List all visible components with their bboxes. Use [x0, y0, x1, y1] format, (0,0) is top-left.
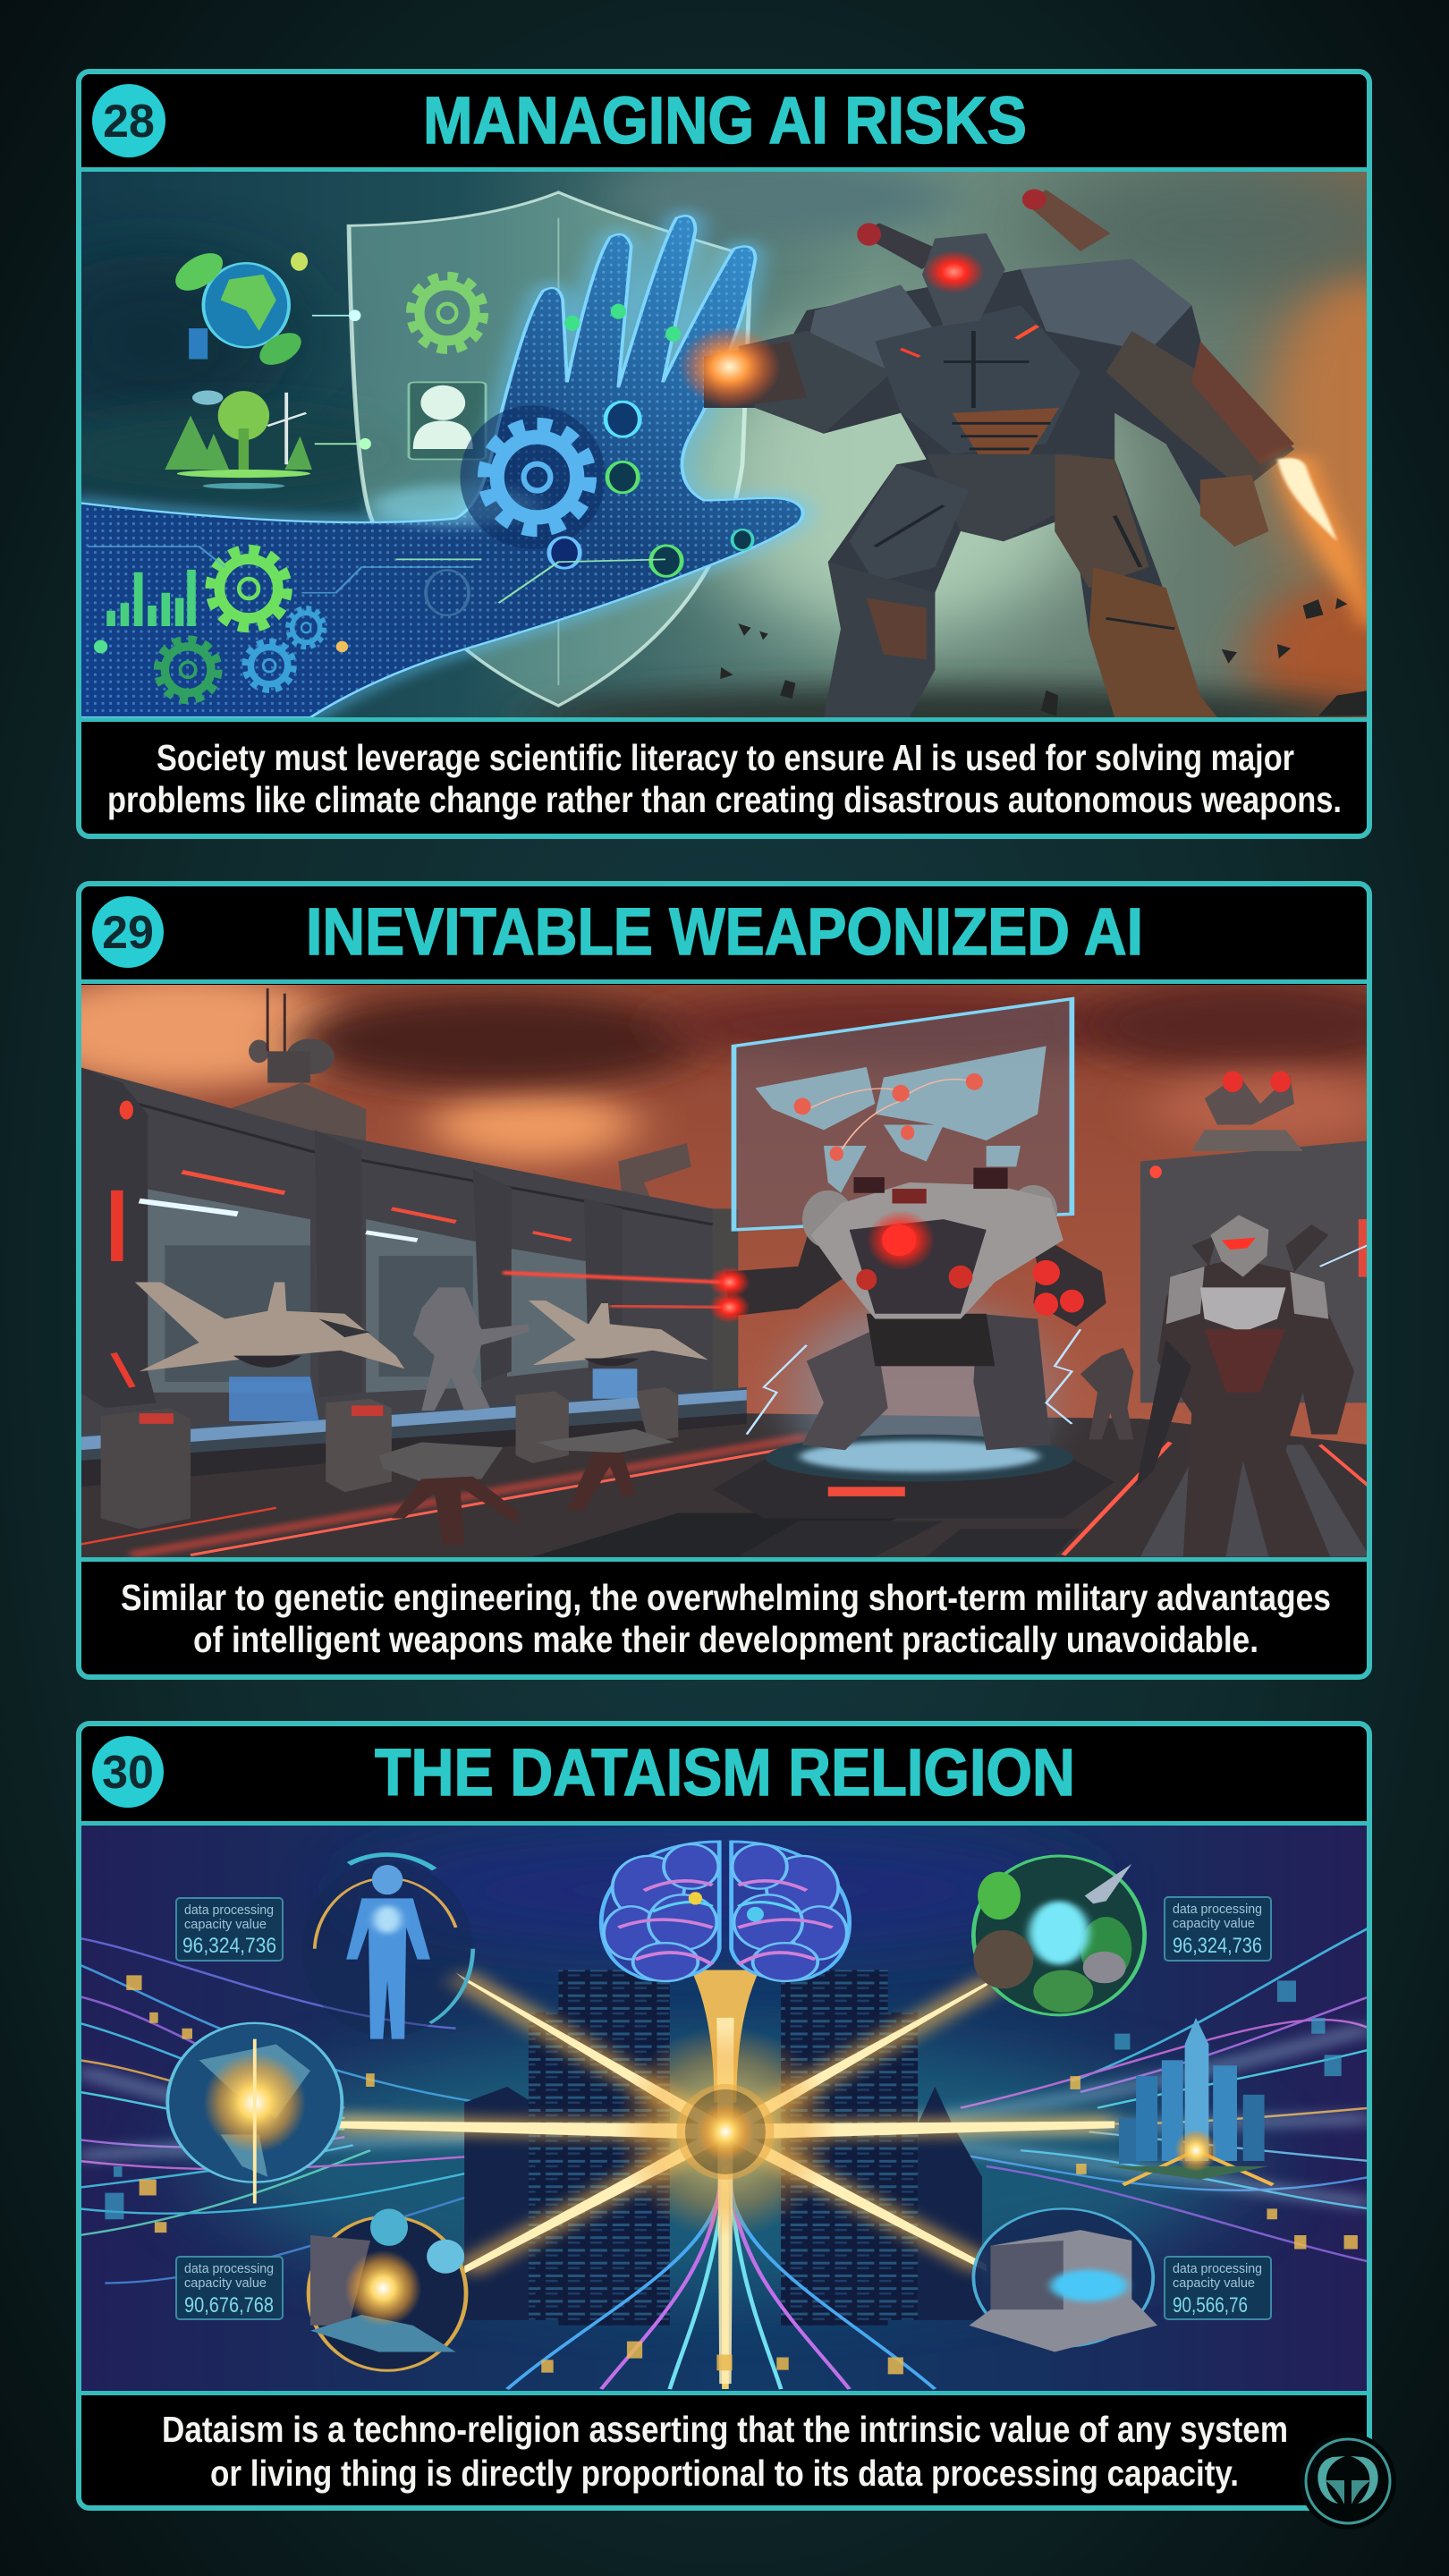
caption — [107, 737, 1342, 820]
data label: bottom left — [176, 2257, 283, 2319]
data label: top right: data processing — [1173, 1902, 1262, 1917]
background soldier — [1080, 1348, 1133, 1440]
conveyor and consoles — [80, 1387, 747, 1529]
icon: trees and wind turbine — [165, 391, 371, 489]
illustration: automated military base — [20, 972, 1423, 1560]
nature circle — [973, 1856, 1145, 2015]
machine emblem left — [309, 2208, 466, 2370]
human circle — [301, 1855, 473, 2039]
title: MANAGING AI RISKS — [423, 83, 1027, 157]
caption: or living thing is directly proportional to its data processing capacity. — [210, 2453, 1239, 2494]
data label: bottom right: 90,566,76 — [1173, 2293, 1248, 2318]
data label: bottom right: capacity value — [1173, 2275, 1255, 2291]
number badge 29: 29 — [102, 907, 154, 959]
illustration: data flows converging on a central core — [54, 1806, 1423, 2400]
data label: top left: 96,324,736 — [182, 1934, 276, 1958]
foreground soldier — [1136, 1215, 1354, 1556]
hand — [80, 216, 803, 717]
data label: top left: data processing — [184, 1902, 274, 1918]
section lines — [79, 979, 1369, 1562]
data label: top right: 96,324,736 — [1173, 1934, 1262, 1958]
globe circle — [167, 2023, 342, 2203]
caption — [121, 1577, 1331, 1660]
back wall and turrets — [618, 1072, 1369, 1402]
data label: top right — [1165, 1897, 1271, 1961]
title: THE DATAISM RELIGION — [375, 1735, 1075, 1809]
core — [614, 2026, 836, 2238]
roots — [507, 2166, 935, 2389]
floor — [80, 1413, 1369, 1560]
number badge 30 — [92, 1736, 164, 1808]
title: INEVITABLE WEAPONIZED AI — [306, 894, 1143, 969]
number badge 29 — [92, 896, 164, 968]
panel: inevitable weaponized AI — [20, 884, 1423, 1677]
data label: bottom right: data processing — [1173, 2261, 1262, 2276]
golden beams — [336, 1972, 1114, 2384]
data chips — [126, 1975, 1358, 2374]
panel border — [79, 72, 1369, 836]
small soldier — [413, 1287, 529, 1411]
debris — [720, 597, 1369, 716]
panel border — [79, 1724, 1369, 2508]
panel: managing AI risks — [20, 72, 1449, 836]
radar tower — [231, 988, 367, 1141]
hand flash and rocket flame — [678, 326, 1376, 634]
data streams — [80, 1928, 1369, 2283]
icon: eco globe — [175, 252, 361, 365]
panel border — [79, 884, 1369, 1677]
number badge 28: 28 — [103, 96, 155, 148]
caption: Dataism is a techno-religion asserting that the intrinsic value of any system — [162, 2409, 1288, 2450]
main mech and platform — [503, 1168, 1367, 1519]
panel: the dataism religion — [54, 1724, 1423, 2508]
holographic map — [733, 999, 1072, 1230]
number badge 30: 30 — [102, 1747, 154, 1799]
robot dogs — [379, 1429, 674, 1545]
data label: bottom left: data processing — [184, 2261, 274, 2276]
data label: bottom right — [1165, 2257, 1271, 2319]
server towers — [464, 1970, 982, 2326]
brain and trunk — [601, 1842, 850, 2103]
shield — [349, 192, 751, 706]
data label: top left: capacity value — [184, 1917, 267, 1932]
data label: top right: capacity value — [1173, 1916, 1255, 1931]
caption: of intelligent weapons make their development practically unavoidable. — [193, 1619, 1258, 1660]
illustration: digital hand shield versus war robot — [81, 172, 1367, 717]
section lines — [79, 1821, 1369, 2395]
section lines — [79, 167, 1369, 722]
city — [1106, 2018, 1273, 2185]
jets — [135, 1282, 708, 1421]
caption — [162, 2409, 1288, 2494]
chart and gears — [88, 547, 473, 700]
robot — [704, 190, 1294, 717]
data label: top left — [176, 1898, 283, 1961]
machine emblem right — [970, 2208, 1157, 2352]
data label: bottom left: capacity value — [184, 2275, 267, 2291]
icon: logo emblem — [1300, 2433, 1396, 2529]
number badge 28 — [92, 84, 165, 157]
data label: bottom left: 90,676,768 — [184, 2293, 274, 2318]
left wall — [80, 1067, 713, 1445]
